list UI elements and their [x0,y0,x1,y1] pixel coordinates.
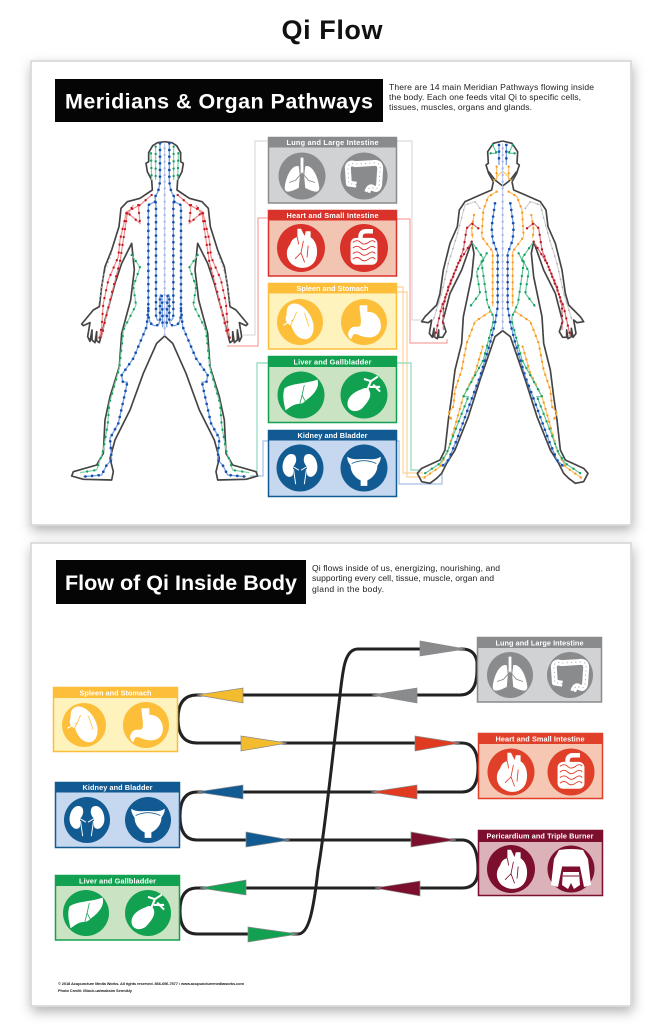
organ box: kidney and bladder [268,430,397,496]
organ box: lung and large intestine [477,637,602,702]
heading: flow of qi: Flow of Qi Inside Body [65,571,297,595]
heading: meridians: Meridians & Organ Pathways [65,90,373,114]
organ box: pericardium and triple burner: Pericardium and Triple Burner [486,832,594,840]
organ box: pericardium and triple burner [478,830,603,896]
text block: flow intro: supporting every cell, tissue, muscle, organ and [312,573,494,583]
figure: back of body with meridians [72,142,258,480]
flow lines [178,649,478,934]
organ box: liver and gallbladder [55,875,180,940]
organ box: kidney and bladder: Kidney and Bladder [298,431,368,440]
footer credits: © 2018 Acupuncture Media Works. All rights reserved. 866-696-7577 • www.acupuncturemediaworks.com [58,981,244,986]
organ box: heart and small intestine [268,210,397,276]
text block: flow intro: gland in the body. [312,584,384,594]
text block: meridian intro: the body. Each one feeds vital Qi to specific cells, [389,92,581,102]
organ box: spleen and stomach: Spleen and Stomach [296,284,368,293]
organ box: heart and small intestine [478,733,603,798]
organ box: lung and large intestine: Lung and Large Intestine [496,638,584,648]
title: Qi Flow [282,15,383,45]
connector lines [227,141,447,484]
organ box: liver and gallbladder: Liver and Gallbladder [294,358,372,366]
organ box: kidney and bladder [55,782,180,848]
organ box: liver and gallbladder: Liver and Gallbladder [79,876,156,886]
organ box: lung and large intestine: Lung and Large Intestine [286,138,378,147]
panel: flow of qi inside body [31,543,631,1006]
organ box: lung and large intestine [268,137,397,203]
footer credits [58,981,244,993]
organ box: heart and small intestine: Heart and Small Intestine [496,734,584,744]
organ box: kidney and bladder: Kidney and Bladder [82,783,153,792]
text block: meridian intro: tissues, muscles, organs and glands. [389,102,532,112]
text block: flow intro [312,563,500,594]
organ box: spleen and stomach [53,687,178,752]
heading: flow of qi [56,560,306,604]
text block: meridian intro [389,82,594,112]
panel: meridians and organ pathways [31,61,631,525]
figure: front of body with meridians [417,141,588,483]
footer credits: Photo Credit: iStock.ua/maksim Sermikly [58,988,133,993]
heading: meridians [55,79,383,122]
organ box: heart and small intestine: Heart and Small Intestine [286,211,378,220]
organ box: spleen and stomach: Spleen and Stomach [80,688,152,698]
text block: meridian intro: There are 14 main Meridian Pathways flowing inside [389,82,594,92]
text block: flow intro: Qi flows inside of us, energizing, nourishing, and [312,563,500,573]
arrows [197,641,465,942]
organ box: spleen and stomach [268,283,397,349]
organ box: liver and gallbladder [268,356,397,422]
